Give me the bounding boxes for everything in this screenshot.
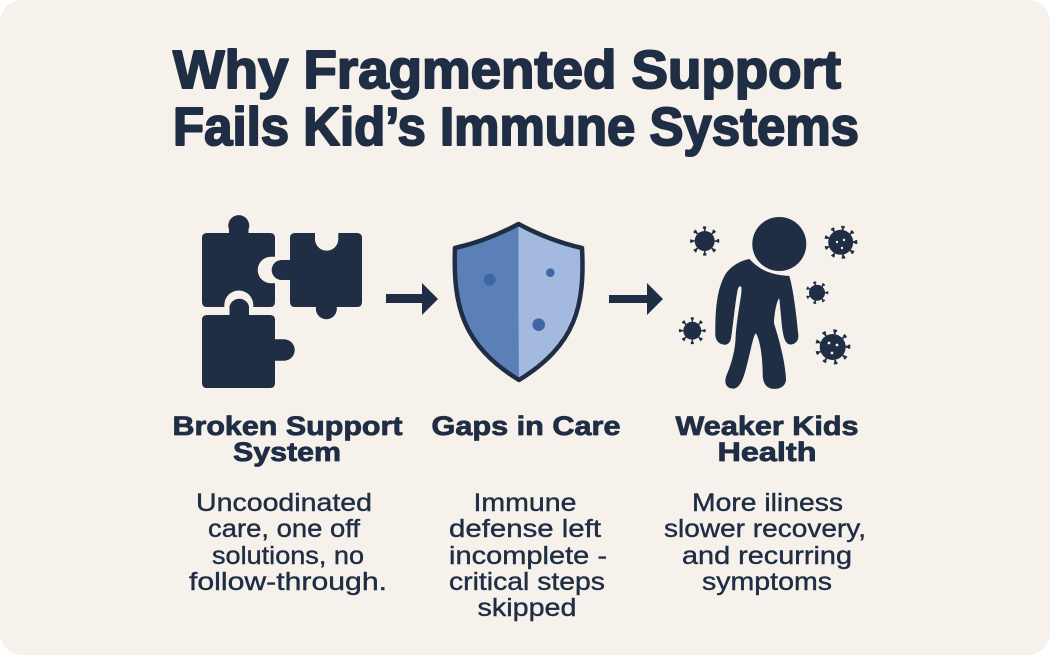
text: Weaker Kids Health description: symptoms [702, 568, 832, 596]
text: Weaker Kids Health description: slower recovery, [664, 515, 866, 543]
icon: weakened child surrounded by germs [680, 217, 856, 389]
shield holes [484, 268, 555, 331]
germ 2 [825, 227, 856, 258]
text: Gaps in Care description: skipped [478, 594, 576, 622]
child head [752, 217, 806, 271]
text: Gaps in Care description: Immune [474, 489, 576, 517]
heading: Weaker Kids Health: Weaker Kids [676, 411, 858, 441]
shield left half [456, 223, 519, 379]
heading: Weaker Kids Health: Health [718, 437, 816, 467]
text: Weaker Kids Health description [664, 489, 866, 596]
germ 5 [816, 330, 849, 364]
icon: shield with gaps [455, 223, 583, 380]
text: Broken Support System description: follow-through. [189, 568, 387, 596]
text: Gaps in Care description: defense left [449, 515, 601, 543]
heading: Broken Support System: System [233, 437, 341, 467]
text: Gaps in Care description: critical steps [449, 568, 605, 596]
title [173, 40, 859, 157]
title: Why Fragmented Support [173, 40, 841, 100]
arrow: puzzle to shield [386, 283, 438, 315]
text: Weaker Kids Health description: and recurring [682, 542, 852, 570]
heading: Weaker Kids Health [676, 411, 858, 467]
heading: Gaps in Care: Gaps in Care [432, 411, 620, 441]
heading: Broken Support System: Broken Support [172, 411, 402, 441]
icon: broken puzzle pieces [202, 215, 362, 388]
germ 3 [806, 282, 828, 303]
text: Weaker Kids Health description: More iliness [692, 489, 843, 517]
text: Broken Support System description [189, 489, 387, 596]
arrow: shield to child [609, 283, 663, 315]
title: Fails Kid’s Immune Systems [173, 97, 859, 157]
text: Broken Support System description: care, one off [208, 515, 360, 543]
shield right half [518, 223, 581, 379]
germ 1 [691, 228, 718, 254]
heading: Broken Support System [172, 411, 402, 467]
germ 4 [680, 318, 705, 343]
text: Broken Support System description: solutions, no [212, 542, 364, 570]
text: Gaps in Care description [449, 489, 607, 622]
text: Broken Support System description: Uncoodinated [196, 489, 372, 517]
shield outline [455, 224, 583, 380]
child body [715, 259, 798, 389]
text: Gaps in Care description: incomplete - [449, 542, 607, 570]
